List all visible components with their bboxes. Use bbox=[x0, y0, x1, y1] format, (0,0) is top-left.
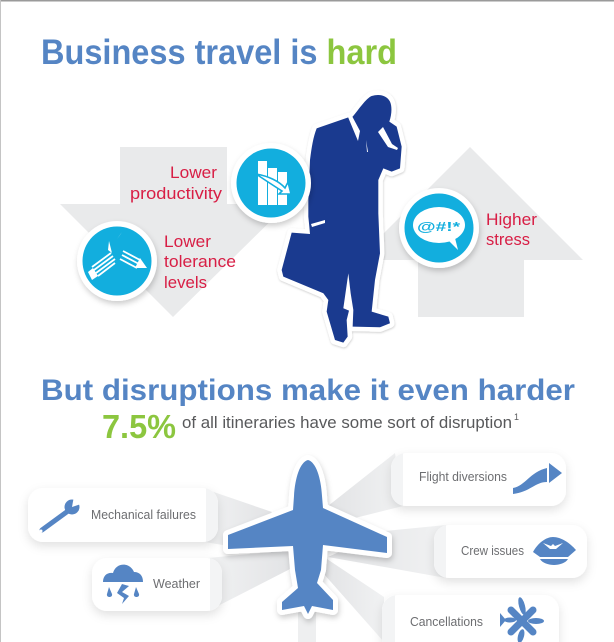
label: lower tolerance levels: tolerance bbox=[164, 252, 236, 271]
statistic: 7.5% bbox=[102, 408, 176, 445]
icon: productivity chart bbox=[231, 143, 311, 223]
card: mechanical failures: Mechanical failures bbox=[91, 508, 196, 522]
label: lower productivity bbox=[130, 163, 223, 203]
arrow: down bbox=[60, 147, 288, 317]
label: lower productivity: Lower bbox=[170, 163, 217, 182]
label: lower productivity: productivity bbox=[130, 184, 223, 203]
heading: disruptions: But disruptions make it even harder bbox=[41, 374, 575, 407]
statistic: 1 bbox=[514, 412, 519, 422]
icon: airplane bbox=[228, 460, 387, 614]
label: lower tolerance levels: Lower bbox=[164, 232, 211, 251]
card: cancellations bbox=[382, 595, 559, 642]
icon: broken pencil bbox=[77, 221, 157, 301]
icon: speech bubble: @#!* bbox=[417, 219, 461, 234]
icon: diversion arrow bbox=[513, 463, 562, 494]
statistic bbox=[102, 408, 519, 445]
label: higher stress bbox=[486, 210, 537, 249]
icon: speech bubble bbox=[399, 188, 479, 268]
card: mechanical failures bbox=[28, 488, 218, 542]
label: lower tolerance levels: levels bbox=[164, 273, 207, 292]
arrow: up bbox=[357, 147, 583, 317]
card: flight diversions: Flight diversions bbox=[419, 470, 507, 484]
label: lower tolerance levels bbox=[164, 232, 236, 292]
label: higher stress: Higher bbox=[486, 210, 537, 229]
icon: wrench bbox=[40, 496, 84, 532]
card: crew issues bbox=[434, 525, 587, 578]
connector beams bbox=[205, 453, 446, 642]
statistic: of all itineraries have some sort of disruption bbox=[182, 414, 512, 432]
card: flight diversions bbox=[391, 453, 566, 506]
card: crew issues: Crew issues bbox=[461, 544, 524, 558]
icon: storm cloud bbox=[103, 565, 143, 604]
card: cancellations: Cancellations bbox=[410, 615, 483, 629]
icon: cancelled plane bbox=[500, 597, 544, 642]
card: weather: Weather bbox=[153, 577, 200, 591]
label: higher stress: stress bbox=[486, 230, 530, 249]
card: weather bbox=[92, 558, 222, 611]
businessman silhouette bbox=[282, 95, 402, 343]
icon: pilot cap bbox=[533, 537, 576, 565]
title: Business travel is hard bbox=[41, 33, 397, 72]
